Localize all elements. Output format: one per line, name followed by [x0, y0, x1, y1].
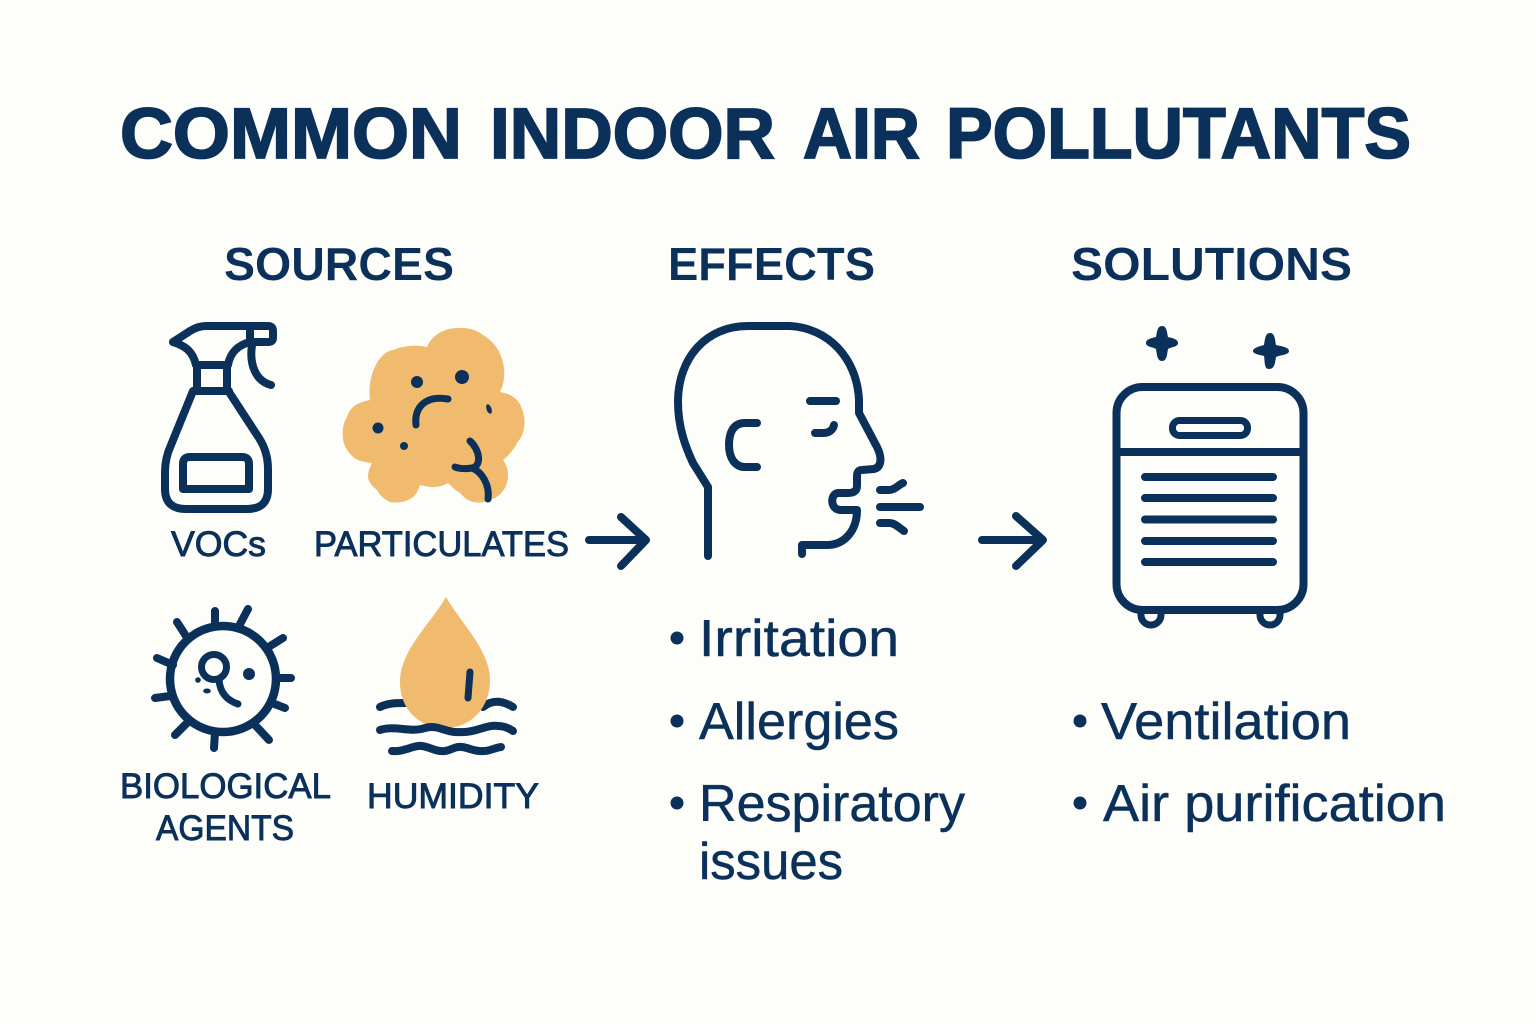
list: effects: Allergies: [699, 693, 899, 751]
title: AIR: [803, 95, 920, 174]
icon: humidity drop: [380, 597, 513, 751]
icon: biological agent: [155, 609, 291, 748]
label: humidity: HUMIDITY: [367, 777, 539, 816]
title: [120, 95, 1411, 174]
list: effects: [670, 610, 965, 891]
icon: particulate cloud: [343, 328, 525, 503]
label: biological agents: [120, 767, 331, 848]
heading: effects: EFFECTS: [668, 238, 875, 290]
label: biological agents: BIOLOGICAL: [120, 767, 331, 806]
title: COMMON: [120, 95, 462, 174]
label: biological agents: AGENTS: [156, 809, 294, 848]
arrow: effects to solutions: [982, 516, 1043, 566]
particle dots: [372, 370, 493, 450]
heading: solutions: SOLUTIONS: [1071, 238, 1352, 290]
arrow: sources to effects: [589, 517, 646, 566]
icon: air purifier: [1116, 326, 1304, 625]
list: effects: Irritation: [699, 610, 899, 668]
label: VOCs: VOCs: [171, 525, 266, 564]
sparkles: [1146, 326, 1289, 369]
list: effects: issues: [699, 833, 843, 891]
list: solutions: Air purification: [1103, 775, 1446, 833]
title: INDOOR: [490, 95, 775, 174]
title: POLLUTANTS: [946, 95, 1411, 174]
list: effects: Respiratory: [699, 775, 965, 833]
icon: head with breath: [678, 326, 920, 556]
list: solutions: Ventilation: [1101, 693, 1351, 751]
list: solutions: [1074, 693, 1446, 833]
label: particulates: PARTICULATES: [314, 525, 569, 564]
icon: spray bottle: [165, 326, 273, 509]
heading: sources: SOURCES: [224, 238, 454, 290]
